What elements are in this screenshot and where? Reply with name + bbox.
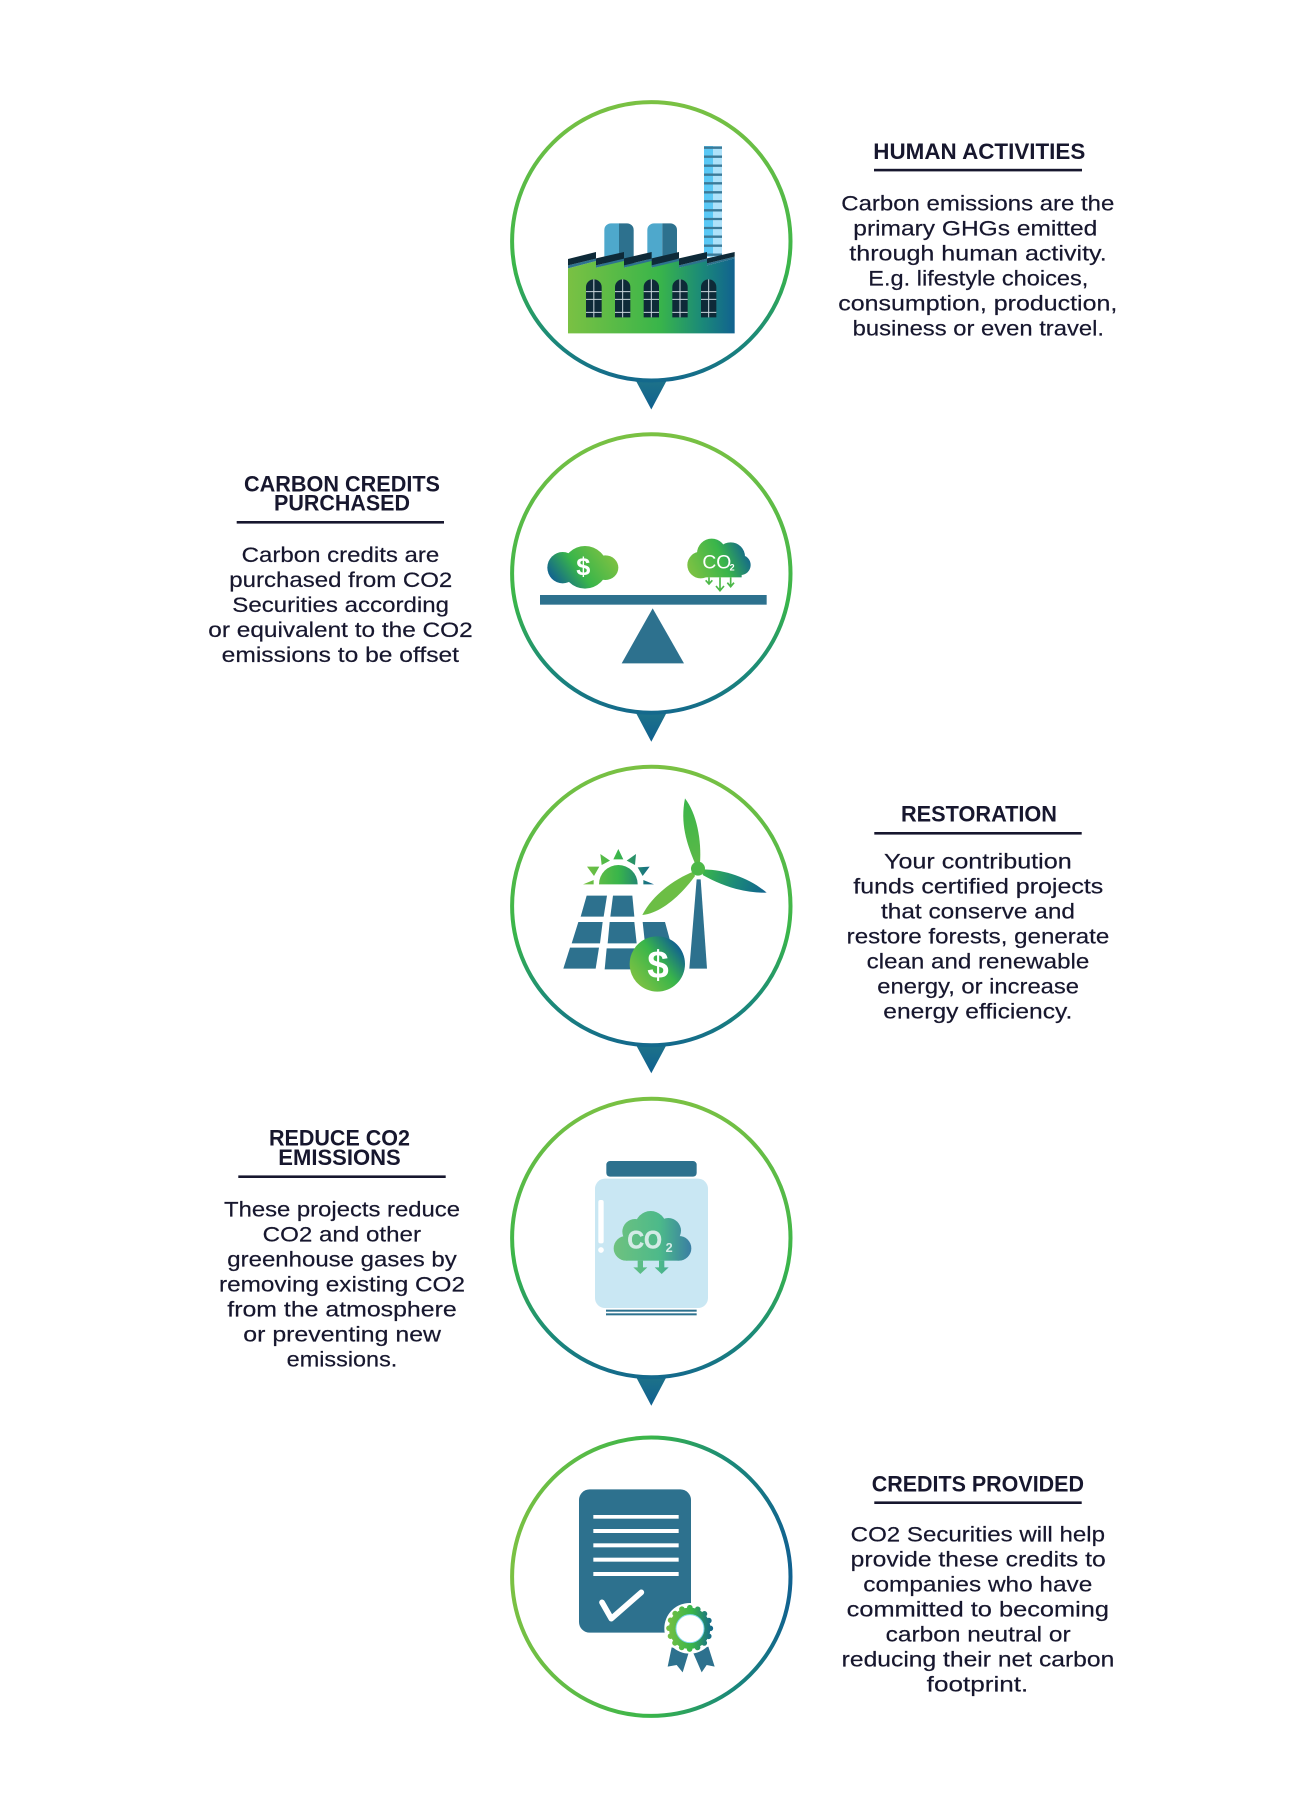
- text block: human activities: business or even travel.: [853, 317, 1104, 341]
- text block: reduce CO2 emissions: greenhouse gases by: [227, 1248, 457, 1272]
- heading: carbon credits purchased: [244, 472, 440, 516]
- heading: reduce CO2 emissions: REDUCE CO2: [269, 1126, 410, 1151]
- text block: credits provided: committed to becoming: [847, 1598, 1109, 1622]
- text block: credits provided: provide these credits to: [851, 1548, 1106, 1572]
- text block: restoration: [847, 849, 1109, 1023]
- text block: restoration: clean and renewable: [867, 949, 1089, 973]
- text block: reduce CO2 emissions: emissions.: [287, 1348, 397, 1372]
- icon: balance scale with clouds: $: [576, 553, 590, 581]
- text block: carbon credits purchased: emissions to be offset: [222, 643, 459, 667]
- icon: balance scale with clouds: CO: [702, 553, 731, 574]
- panel: human activities: [838, 139, 1117, 341]
- text block: credits provided: CO2 Securities will help: [851, 1523, 1105, 1547]
- text block: human activities: E.g. lifestyle choices,: [868, 267, 1088, 291]
- icon: jar containing CO2 cloud: [595, 1161, 708, 1315]
- heading: credits provided: CREDITS PROVIDED: [872, 1472, 1084, 1497]
- text block: carbon credits purchased: purchased from CO2: [229, 568, 452, 592]
- text block: reduce CO2 emissions: CO2 and other: [263, 1223, 421, 1247]
- text block: carbon credits purchased: [208, 543, 473, 667]
- text block: reduce CO2 emissions: [219, 1198, 465, 1372]
- icon: balance scale with clouds: [540, 539, 767, 663]
- text block: human activities: consumption, production,: [838, 292, 1117, 316]
- text block: restoration: energy efficiency.: [883, 999, 1072, 1023]
- text block: human activities: [838, 192, 1117, 341]
- text block: carbon credits purchased: or equivalent to the CO2: [208, 618, 473, 642]
- icon: factory: [568, 146, 735, 333]
- text block: restoration: funds certified projects: [853, 874, 1103, 898]
- panel: reduce CO2 emissions: [219, 1126, 465, 1372]
- text block: reduce CO2 emissions: removing existing CO2: [219, 1273, 465, 1297]
- heading: human activities: HUMAN ACTIVITIES: [873, 139, 1085, 164]
- text block: human activities: Carbon emissions are the: [841, 192, 1114, 216]
- panel: restoration: [847, 802, 1109, 1023]
- text block: reduce CO2 emissions: or preventing new: [243, 1323, 442, 1347]
- heading: reduce CO2 emissions: [269, 1126, 410, 1170]
- text block: carbon credits purchased: Securities according: [232, 593, 449, 617]
- text block: restoration: restore forests, generate: [847, 924, 1109, 948]
- heading: carbon credits purchased: PURCHASED: [274, 491, 410, 516]
- heading: carbon credits purchased: CARBON CREDITS: [244, 472, 440, 497]
- panel: carbon credits purchased: [208, 472, 473, 667]
- heading: reduce CO2 emissions: EMISSIONS: [278, 1145, 401, 1170]
- icon: balance scale with clouds: 2: [730, 563, 735, 573]
- text block: reduce CO2 emissions: These projects reduce: [224, 1198, 460, 1222]
- text block: credits provided: companies who have: [863, 1573, 1092, 1597]
- text block: credits provided: footprint.: [927, 1673, 1028, 1697]
- step 1: circle with factory icon: [512, 102, 790, 410]
- icon: jar containing CO2 cloud: CO: [627, 1226, 662, 1254]
- text block: restoration: energy, or increase: [877, 974, 1079, 998]
- icon: solar panel, wind turbine and dollar coin: [563, 798, 767, 992]
- text block: restoration: Your contribution: [884, 849, 1072, 873]
- text block: human activities: primary GHGs emitted: [853, 217, 1097, 241]
- text block: restoration: that conserve and: [881, 899, 1075, 923]
- step 4: circle with CO2 jar icon: [512, 1099, 790, 1406]
- icon: certificate document with seal: [579, 1489, 715, 1672]
- heading: restoration: RESTORATION: [901, 802, 1057, 827]
- step 2: circle with balance scale icon: [512, 434, 790, 742]
- icon: solar panel, wind turbine and dollar coin: $: [647, 944, 669, 987]
- text block: credits provided: carbon neutral or: [886, 1623, 1071, 1647]
- step 3: circle with renewable energy icon: [512, 767, 790, 1073]
- step 5: circle with certificate icon: [512, 1438, 790, 1716]
- panel: credits provided: [842, 1472, 1114, 1697]
- icon: jar containing CO2 cloud: 2: [666, 1241, 673, 1255]
- text block: carbon credits purchased: Carbon credits are: [242, 543, 439, 567]
- text block: reduce CO2 emissions: from the atmosphere: [227, 1298, 457, 1322]
- text block: human activities: through human activity.: [849, 242, 1107, 266]
- text block: credits provided: [842, 1523, 1114, 1697]
- text block: credits provided: reducing their net carbon: [842, 1648, 1114, 1672]
